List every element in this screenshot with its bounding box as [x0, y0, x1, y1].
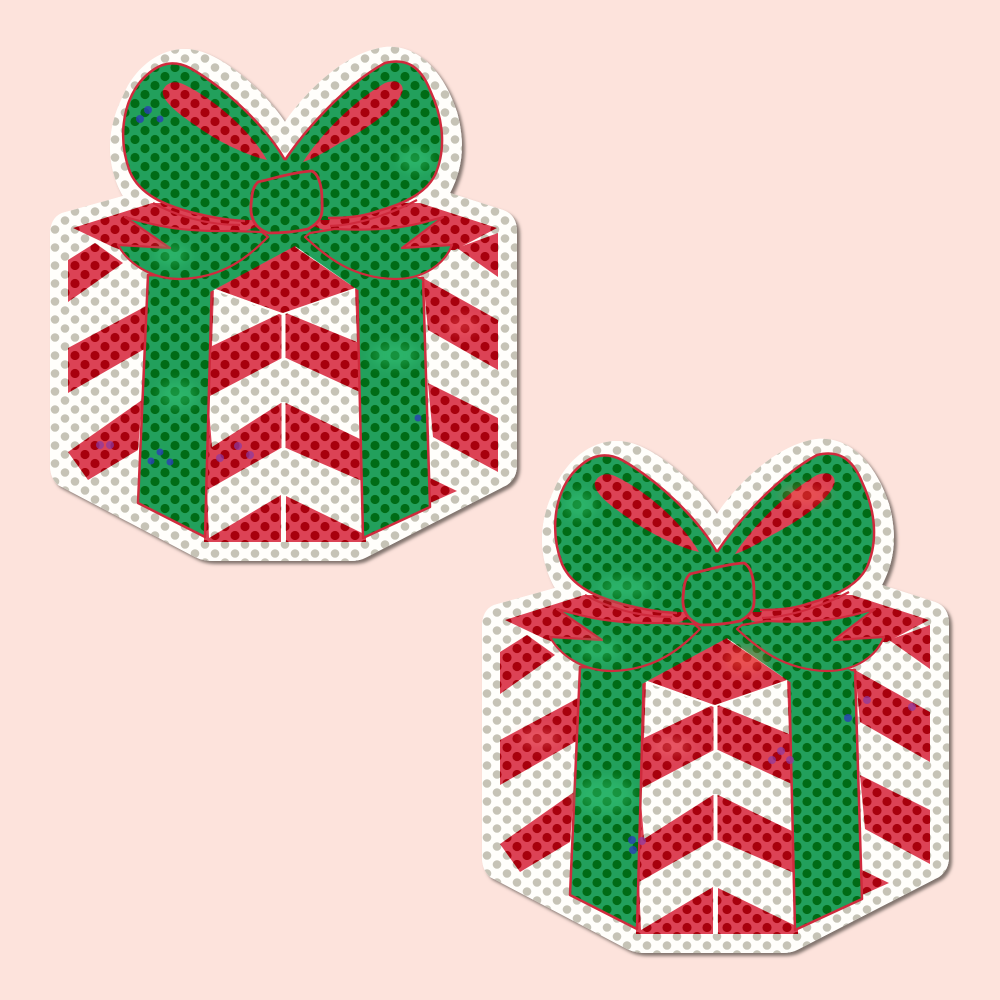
gift sticker: upper left — [50, 47, 517, 561]
holographic shimmer — [518, 487, 916, 854]
holographic shimmer — [96, 106, 480, 466]
gift sticker: lower right — [482, 439, 949, 953]
